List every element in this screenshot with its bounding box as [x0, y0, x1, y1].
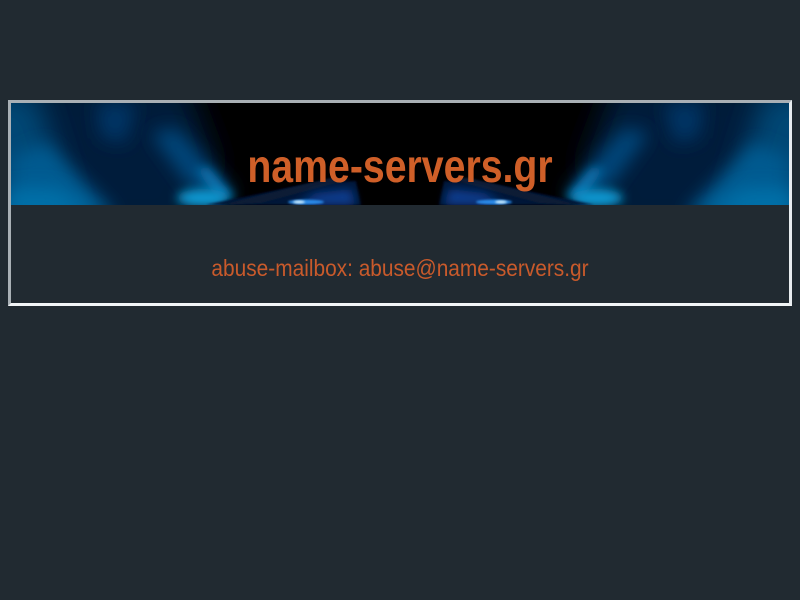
title: name-servers.gr	[247, 140, 553, 192]
panel: bordered header card	[8, 100, 792, 306]
abuse contact text: abuse-mailbox: abuse@name-servers.gr	[211, 255, 589, 281]
banner image: mirrored blue light rays	[11, 103, 789, 205]
